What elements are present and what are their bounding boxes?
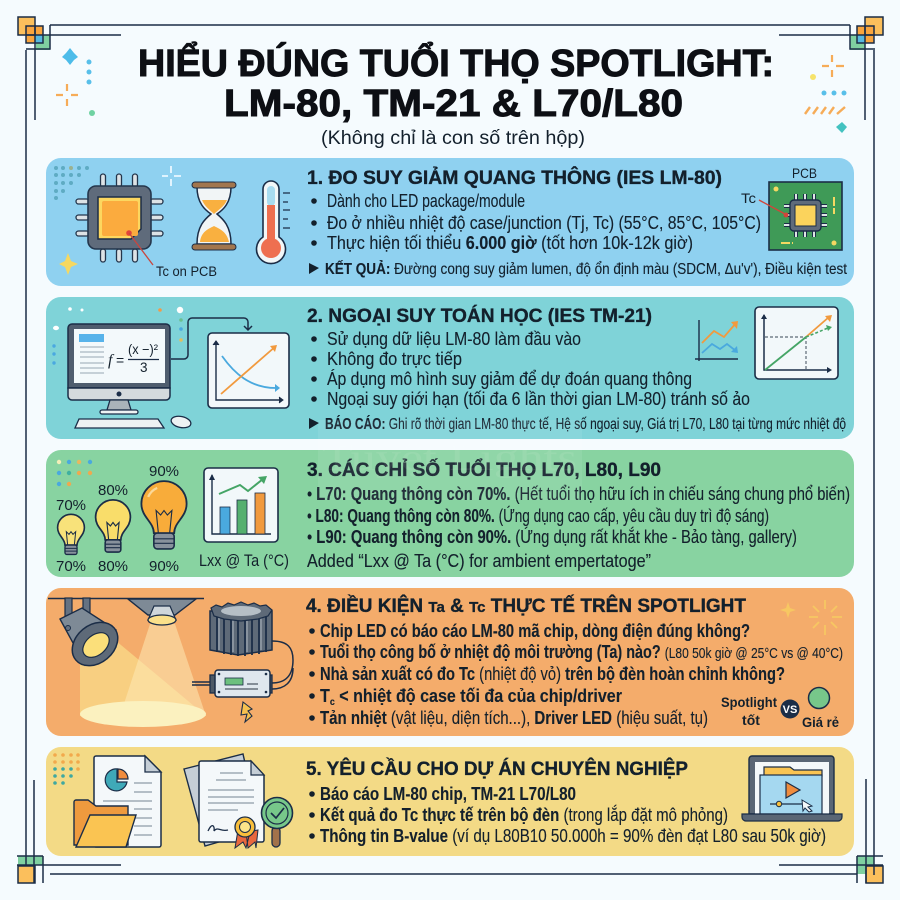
heading 5: 5. YÊU CẦU CHO DỰ ÁN CHUYÊN NGHIỆP bbox=[306, 758, 688, 780]
comparison: spotlight vs cheap: tốt bbox=[742, 712, 760, 728]
decorative sparkles top left bbox=[56, 48, 95, 116]
heading 3: 3. CÁC CHỈ SỐ TUỔI THỌ L70, L80, L90 bbox=[307, 459, 661, 481]
watermark bbox=[318, 420, 582, 500]
bullets panel 3: Added “Lxx @ Ta (°C) for ambient empertatoge” bbox=[307, 551, 651, 571]
chart: Lxx bars bbox=[204, 468, 278, 542]
heading 4: 4. ĐIỀU KIỆN Ta & Tc THỰC TẾ TRÊN SPOTLIGHT bbox=[306, 595, 746, 617]
icon: small trend chart bbox=[695, 320, 738, 361]
icon: thermometer bbox=[256, 181, 290, 264]
bulb percentage labels: 70% bbox=[56, 497, 86, 514]
icon: ceiling downlight bbox=[128, 599, 196, 625]
icon: hourglass bbox=[192, 182, 236, 250]
bullets panel 5: Kết quả đo Tc thực tế trên bộ đèn (trong lắp đặt mô phỏng) bbox=[320, 804, 728, 825]
chart: decay curves bbox=[208, 333, 289, 408]
icon: bulb 80% bbox=[96, 500, 130, 552]
bullets panel 2: Áp dụng mô hình suy giảm để dự đoán quang thông bbox=[327, 369, 692, 389]
watermark: Tuyệt Lights bbox=[322, 437, 577, 479]
bullets panel 2: Ngoại suy giới hạn (tối đa 6 lần thời gian LM-80) tránh số ảo bbox=[327, 389, 750, 409]
bullets panel 2: Không đo trực tiếp bbox=[327, 349, 462, 369]
bullets panel 5: Thông tin B-value (ví dụ L80B10 50.000h = 90% đèn đạt L80 sau 50k giờ) bbox=[320, 826, 826, 846]
dot pattern panel 5 bbox=[53, 753, 80, 785]
label: Tc on PCB: Tc on PCB bbox=[156, 263, 217, 279]
icon: LED chip bbox=[76, 174, 163, 265]
panel 5: project requirements bbox=[46, 747, 854, 856]
icon: certificate and magnifier bbox=[184, 754, 292, 848]
bullets panel 4: Tản nhiệt (vật liệu, diện tích...), Driver LED (hiệu suất, tụ) bbox=[320, 708, 708, 728]
icon: bulb 90% bbox=[141, 481, 187, 549]
bulb percentage labels: 80% bbox=[98, 558, 128, 575]
panel 1: LM-80 bbox=[46, 158, 854, 286]
wire and LED driver bbox=[192, 641, 293, 697]
icon: computer with formula: (x −)² bbox=[128, 342, 158, 357]
bullets panel 5 bbox=[309, 784, 826, 846]
dot pattern panel 3 bbox=[57, 460, 92, 486]
icon: computer with formula: = bbox=[116, 352, 124, 368]
arrow: computer to chart bbox=[171, 318, 252, 359]
panel 4: Ta Tc conditions bbox=[46, 588, 854, 736]
panel 3: L70 L80 L90 bbox=[46, 450, 854, 577]
comparison: spotlight vs cheap: Spotlight bbox=[721, 694, 777, 710]
subtitle: (Không chỉ là con số trên hộp) bbox=[321, 128, 585, 149]
comparison: spotlight vs cheap bbox=[721, 688, 839, 730]
bulb percentage labels: 90% bbox=[149, 463, 179, 480]
comparison: spotlight vs cheap: VS bbox=[783, 704, 797, 716]
sparkles panel 1 bbox=[59, 166, 181, 275]
sparkles panel 4 bbox=[780, 600, 842, 635]
decorative sparkles top right bbox=[805, 55, 847, 133]
icon: laptop with video folder bbox=[742, 756, 842, 821]
panel 2: TM-21 bbox=[46, 297, 854, 439]
icon: track spotlight bbox=[48, 598, 204, 675]
heading 2: 2. NGOẠI SUY TOÁN HỌC (IES TM-21) bbox=[307, 305, 652, 327]
bulb percentage labels: 90% bbox=[149, 558, 179, 575]
bulb percentage labels: 80% bbox=[98, 482, 128, 499]
comparison: spotlight vs cheap: Giá rẻ bbox=[802, 714, 839, 730]
bullets panel 4: Nhà sản xuất có đo Tc (nhiệt độ vỏ) trên bộ đèn hoàn chỉnh không? bbox=[320, 664, 785, 684]
label: Lxx @ Ta: Lxx @ Ta (°C) bbox=[199, 551, 289, 570]
bullets panel 3 bbox=[307, 484, 850, 571]
icon: heatsink bbox=[210, 602, 272, 656]
icon: computer with formula: 3 bbox=[140, 360, 148, 375]
icon: computer with formula bbox=[68, 324, 192, 429]
bullets panel 2 bbox=[311, 329, 750, 409]
bullets panel 4: Chip LED có báo cáo LM-80 mã chip, dòng điện đúng không? bbox=[320, 621, 750, 641]
bullets panel 4: T bbox=[320, 686, 331, 706]
dot pattern panel 1 bbox=[54, 166, 89, 200]
bullets panel 5: Báo cáo LM-80 chip, TM-21 L70/L80 bbox=[320, 784, 576, 804]
bullets panel 4 bbox=[309, 621, 843, 728]
bullets panel 2: Sử dụng dữ liệu LM-80 làm đầu vào bbox=[327, 329, 581, 349]
chart: extrapolation bbox=[755, 307, 838, 379]
bullets panel 4: Tuổi thọ công bố ở nhiệt độ môi trường (Ta) nào? (L80 50k giờ @ 25°C vs @ 40°C) bbox=[320, 642, 843, 662]
bullets panel 3: • L80: Quang thông còn 80%. (Ứng dụng cao cấp, yêu cầu duy trì độ sáng) bbox=[307, 505, 769, 526]
illustration: light beams bbox=[80, 624, 206, 727]
bulb percentage labels bbox=[56, 463, 179, 575]
heading 1: 1. ĐO SUY GIẢM QUANG THÔNG (IES LM-80) bbox=[307, 167, 722, 189]
decorative dots panel 2 bbox=[52, 307, 183, 365]
icon: computer with formula: f bbox=[108, 352, 115, 369]
bullets panel 4: c bbox=[330, 697, 335, 708]
icon: PCB board bbox=[759, 182, 842, 250]
bullets panel 1: Đo ở nhiều nhiệt độ case/junction (Tj, Tc) (55°C, 85°C, 105°C) bbox=[327, 213, 761, 233]
title: LM-80, TM-21 & L70/L80 bbox=[224, 83, 683, 125]
bullets panel 1: Dành cho LED package/module bbox=[327, 191, 525, 211]
bullets panel 1: Thực hiện tối thiểu 6.000 giờ (tốt hơn 10k-12k giờ) bbox=[327, 233, 693, 253]
bulb percentage labels: 70% bbox=[56, 558, 86, 575]
icon: document with pie chart and folder bbox=[74, 756, 161, 847]
title: HIỂU ĐÚNG TUỔI THỌ SPOTLIGHT: bbox=[138, 40, 774, 85]
label: PCB: PCB bbox=[792, 165, 817, 181]
label: Tc: Tc bbox=[741, 190, 756, 206]
icon: lightning bolt bbox=[241, 702, 252, 722]
icon: bulb 70% bbox=[58, 514, 84, 554]
bullets panel 4: < nhiệt độ case tối đa của chip/driver bbox=[335, 686, 622, 706]
title bbox=[138, 40, 774, 125]
bullets panel 1 bbox=[311, 191, 761, 253]
bullets panel 3: • L90: Quang thông còn 90%. (Ứng dụng rất khắt khe - Bảo tàng, gallery) bbox=[307, 526, 797, 547]
